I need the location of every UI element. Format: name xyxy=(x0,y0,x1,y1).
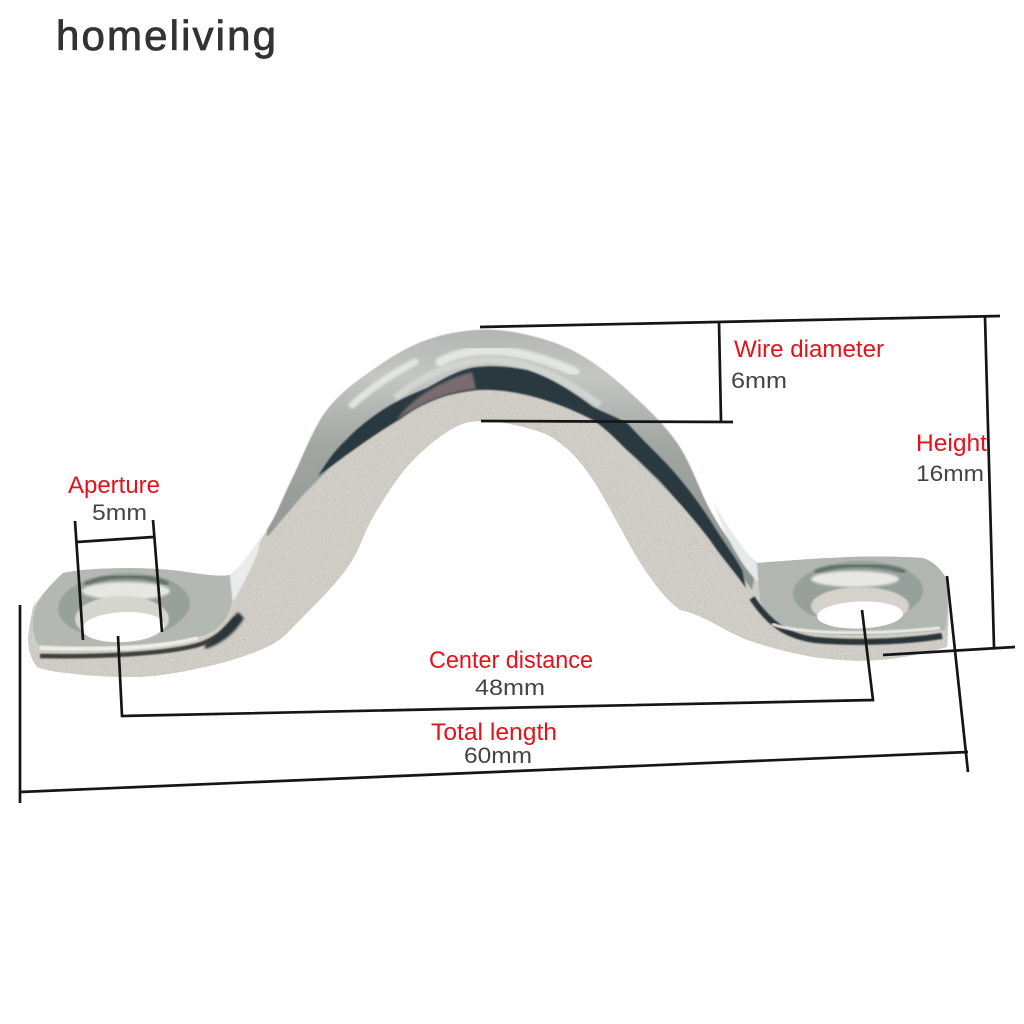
value: 60mm: 60mm xyxy=(464,743,532,768)
right plate dark edge xyxy=(752,598,942,642)
label: total length: Total length xyxy=(431,719,557,746)
right countersink highlights xyxy=(811,571,899,587)
wire mid light band xyxy=(395,360,600,405)
left countersink highlights xyxy=(82,582,170,600)
wire bright highlights xyxy=(352,362,415,405)
value: 48mm: 48mm xyxy=(475,675,545,700)
center distance lines xyxy=(118,610,873,716)
title: brand name: homeliving xyxy=(56,12,276,59)
label: center distance: Center distance xyxy=(429,647,593,674)
right plate bright edge xyxy=(772,624,940,633)
label: wire diameter: Wire diameter xyxy=(734,336,884,363)
right bend highlight xyxy=(713,500,758,582)
left countersink inner ring xyxy=(75,596,169,642)
right hole xyxy=(817,600,903,630)
total length lines xyxy=(20,576,968,803)
wire top highlight xyxy=(440,351,575,372)
left bend highlight xyxy=(230,534,262,602)
height lines xyxy=(883,317,1015,655)
label: aperture: Aperture xyxy=(68,472,160,499)
wire diameter lines xyxy=(481,322,733,422)
right plate face xyxy=(757,556,948,635)
wire dark reflection band xyxy=(318,366,746,588)
wire upper silver surface xyxy=(267,330,757,590)
wire diameter and height top line xyxy=(480,316,1000,327)
right countersink inner ring xyxy=(811,587,909,625)
stainless steel pad eye bracket xyxy=(28,330,948,677)
left plate bright edge xyxy=(40,638,198,649)
value: 6mm: 6mm xyxy=(731,368,787,393)
left countersink dark top ring xyxy=(85,576,168,584)
label: height: Height xyxy=(916,430,987,457)
bracket body silhouette xyxy=(28,330,948,677)
left plate dark edge xyxy=(40,618,236,656)
value: 5mm: 5mm xyxy=(92,500,147,525)
aperture lines xyxy=(75,520,162,640)
left plate face xyxy=(33,568,232,646)
wire brown reflection xyxy=(396,372,476,421)
left countersink xyxy=(56,570,192,642)
right countersink dark top ring xyxy=(815,565,905,572)
left bend dark blot xyxy=(205,612,244,649)
dimension lines xyxy=(20,316,1015,803)
right countersink xyxy=(792,559,924,625)
value: 16mm: 16mm xyxy=(916,461,984,486)
left hole xyxy=(81,610,165,644)
